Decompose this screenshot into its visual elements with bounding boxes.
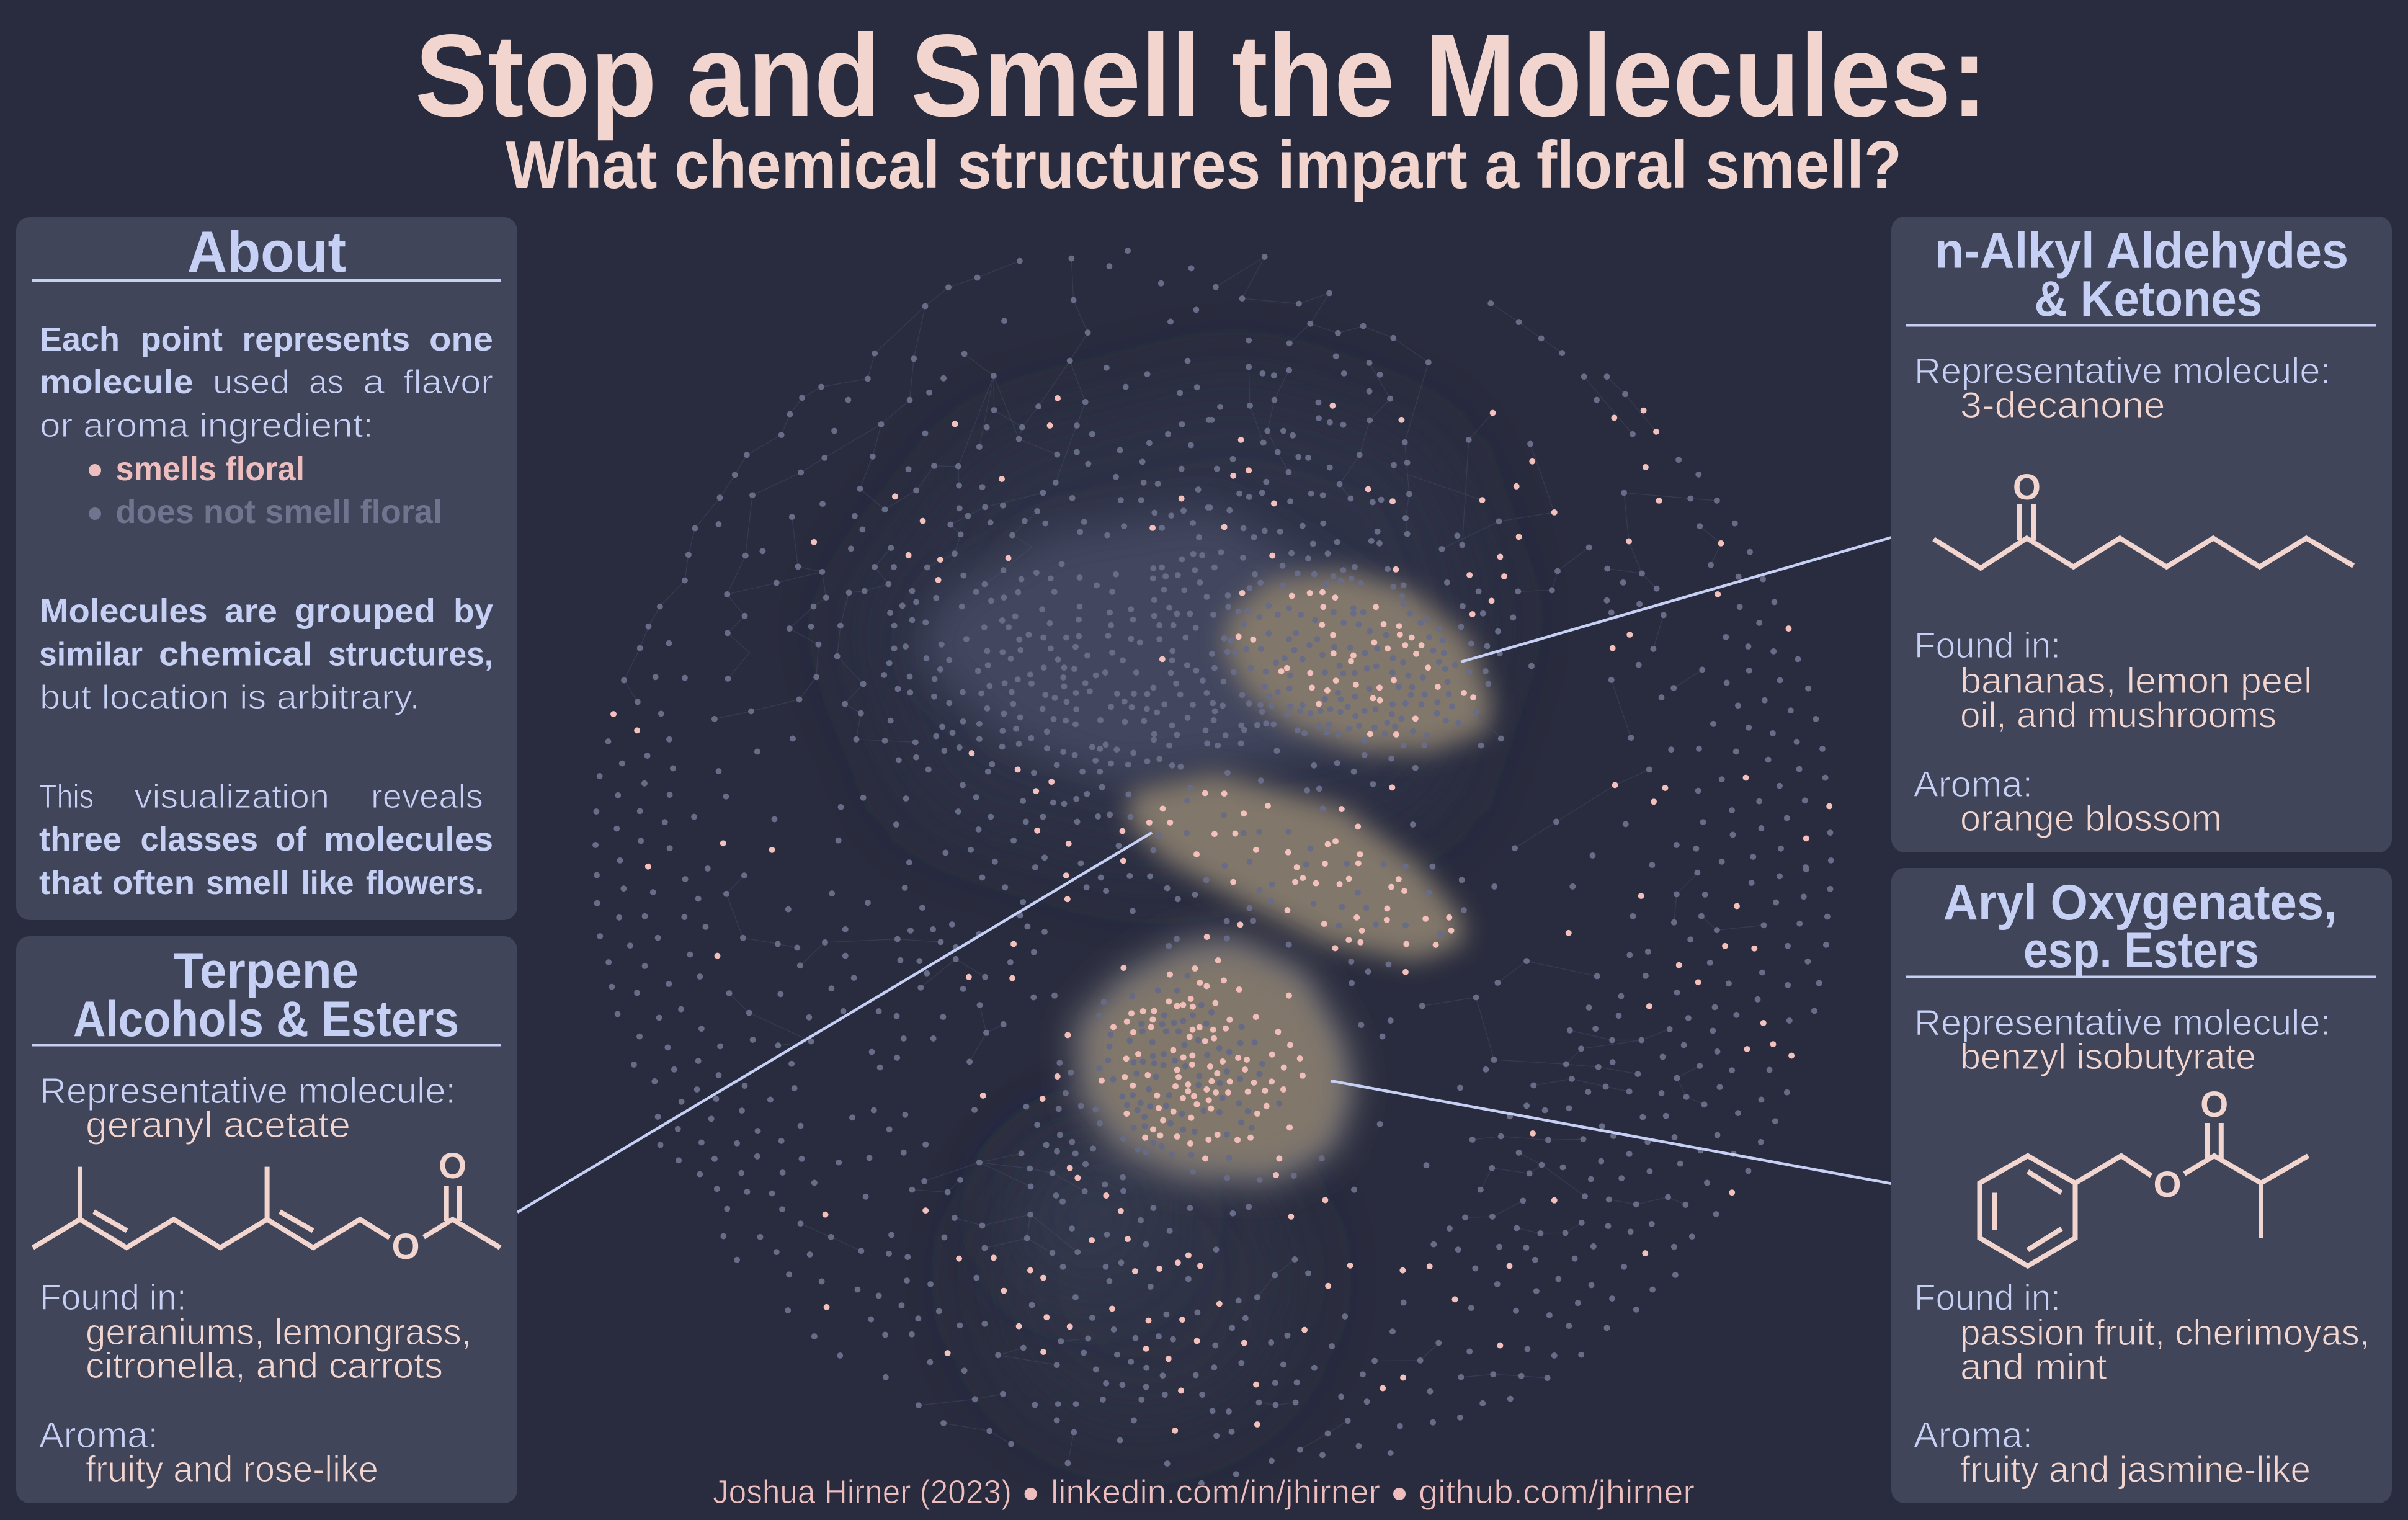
- label: representative molecule: 3-decanone: [1960, 385, 2165, 426]
- highlighted cluster: terpene alcohols and esters: [1133, 779, 1458, 955]
- label: found in: bananas, lemon peel: [1960, 661, 2312, 701]
- dots: lower-right quadrant: [1213, 869, 1831, 1474]
- dots: upper-left quadrant: [595, 251, 1209, 869]
- label: found in: geraniums, lemongrass,: [86, 1312, 471, 1352]
- icon: 3-decanone structure: O: [2013, 467, 2041, 507]
- text block: three classes: molecules: [324, 821, 493, 858]
- heading: aryl oxygenates: Aryl Oxygenates,: [1943, 875, 2337, 931]
- icon: geranyl acetate structure: [33, 1146, 500, 1267]
- text block: three classes: that: [39, 864, 102, 901]
- label: representative molecule: [1914, 351, 2330, 426]
- heading: terpene: Terpene: [174, 943, 359, 999]
- edge haze: network density: [856, 385, 1489, 1427]
- label: aroma: [39, 1415, 378, 1490]
- text block: grouping: but location is arbitrary.: [40, 679, 420, 716]
- text block: what points mean: Each: [40, 321, 120, 358]
- text block: grouping: similar: [39, 635, 143, 673]
- title: Stop and Smell the Molecules:: [415, 11, 1987, 141]
- heading: about: About: [187, 219, 346, 284]
- footer: credits: github.com/jhirner: [1419, 1473, 1695, 1511]
- heading: aldehydes: & Ketones: [2035, 271, 2262, 327]
- label: aroma: Aroma:: [39, 1415, 158, 1455]
- label: aroma: [1914, 764, 2222, 839]
- text block: grouping: [39, 592, 493, 716]
- label: aroma: Aroma:: [1914, 1415, 2033, 1455]
- text block: three classes: visualization: [135, 778, 329, 815]
- text block: three classes: reveals: [371, 778, 483, 815]
- arrow: aryl callout leader: [1331, 1081, 1892, 1184]
- footer: credits: Joshua Hirner (2023): [713, 1473, 1012, 1511]
- arrow: aldehydes callout leader: [1461, 537, 1892, 662]
- label: aroma: fruity and rose-like: [86, 1449, 378, 1490]
- footer: credits: linkedin.com/in/jhirner: [1051, 1473, 1380, 1511]
- heading: terpene: [73, 943, 459, 1047]
- label: aroma: Aroma:: [1914, 764, 2033, 805]
- label: representative molecule: Representative molecule:: [1914, 351, 2330, 391]
- panel: n-alkyl aldehydes and ketones: [1891, 217, 2392, 852]
- label: found in: passion fruit, cherimoyas,: [1960, 1313, 2370, 1353]
- heading: terpene: Alcohols & Esters: [73, 991, 459, 1047]
- icon: 3-decanone structure: [1933, 467, 2353, 568]
- arrow: terpene callout leader: [517, 833, 1152, 1212]
- text block: grouping: chemical: [159, 635, 313, 673]
- icon: geranyl acetate structure: O: [439, 1146, 466, 1186]
- label: representative molecule: [1914, 1003, 2330, 1077]
- panel: about: [16, 217, 517, 920]
- text block: grouping: structures,: [328, 635, 493, 673]
- text block: three classes: [39, 778, 493, 901]
- text block: grouping: Molecules: [40, 592, 208, 630]
- text block: three classes: of: [275, 821, 307, 858]
- label: found in: and mint: [1960, 1347, 2107, 1387]
- footer: credits: [713, 1473, 1695, 1511]
- dots: aryl cluster detail: [1055, 921, 1362, 1202]
- label: found in: Found in:: [1914, 1278, 2061, 1318]
- label: representative molecule: benzyl isobutyrate: [1960, 1037, 2256, 1077]
- label: aroma: orange blossom: [1960, 798, 2222, 839]
- text block: what points mean: represents: [242, 321, 410, 358]
- heading: aldehydes: n-Alkyl Aldehydes: [1935, 223, 2348, 279]
- text block: grouping: are: [225, 592, 277, 630]
- text block: what points mean: a: [363, 364, 385, 401]
- text block: three classes: smell: [206, 864, 289, 901]
- text block: what points mean: one: [429, 321, 493, 358]
- label: found in: Found in:: [40, 1277, 187, 1318]
- text block: three classes: three: [39, 821, 122, 858]
- icon: benzyl isobutyrate structure: [1980, 1084, 2308, 1266]
- label: representative molecule: geranyl acetate: [86, 1105, 350, 1145]
- dots: lower-left quadrant: [597, 875, 1206, 1483]
- label: found in: Found in:: [1914, 625, 2061, 666]
- text block: what points mean: or aroma ingredient:: [40, 407, 373, 444]
- panel: aryl oxygenates and esters: [1891, 868, 2392, 1503]
- label: found in: [1914, 1278, 2370, 1387]
- icon: geranyl acetate structure: O: [391, 1227, 420, 1267]
- label: representative molecule: Representative molecule:: [40, 1071, 456, 1111]
- text block: three classes: often: [112, 864, 195, 901]
- label: found in: [1914, 625, 2312, 736]
- heading: aryl oxygenates: [1943, 875, 2337, 978]
- text block: three classes: classes: [140, 821, 258, 858]
- subtitle: What chemical structures impart a floral smell?: [506, 127, 1902, 203]
- network chart: molecules grouped by structure: [595, 251, 1831, 1483]
- dots: upper-right quadrant: [1210, 257, 1831, 867]
- panel: terpene alcohols and esters: [16, 936, 517, 1503]
- label: aroma: fruity and jasmine-like: [1960, 1450, 2311, 1490]
- text block: what points mean: flavor: [403, 364, 493, 401]
- text block: grouping: grouped: [294, 592, 435, 630]
- text block: three classes: flowers.: [366, 864, 484, 901]
- label: representative molecule: Representative molecule:: [1914, 1003, 2330, 1043]
- text block: what points mean: [40, 321, 493, 444]
- label: found in: citronella, and carrots: [86, 1346, 443, 1386]
- label: representative molecule: [40, 1071, 456, 1145]
- text block: what points mean: molecule: [40, 364, 194, 401]
- text block: what points mean: as: [309, 364, 344, 401]
- icon: benzyl isobutyrate structure: O: [2200, 1084, 2228, 1125]
- highlighted cluster: aryl oxygenates and esters: [1073, 934, 1355, 1185]
- label: found in: [40, 1277, 471, 1386]
- text block: three classes: This: [39, 778, 94, 815]
- label: aroma: [1914, 1415, 2311, 1490]
- text block: what points mean: point: [140, 321, 223, 358]
- label: found in: oil, and mushrooms: [1960, 695, 2276, 736]
- legend: smells floral: smells floral: [115, 450, 305, 488]
- text block: what points mean: used: [213, 364, 290, 401]
- text block: three classes: like: [301, 864, 354, 901]
- legend: does not smell floral: does not smell floral: [115, 493, 442, 530]
- highlighted cluster: n-alkyl aldehydes and ketones: [1228, 577, 1486, 746]
- heading: aldehydes: [1935, 223, 2348, 327]
- text block: grouping: by: [453, 592, 493, 630]
- icon: benzyl isobutyrate structure: O: [2153, 1165, 2182, 1205]
- heading: aryl oxygenates: esp. Esters: [2023, 923, 2259, 978]
